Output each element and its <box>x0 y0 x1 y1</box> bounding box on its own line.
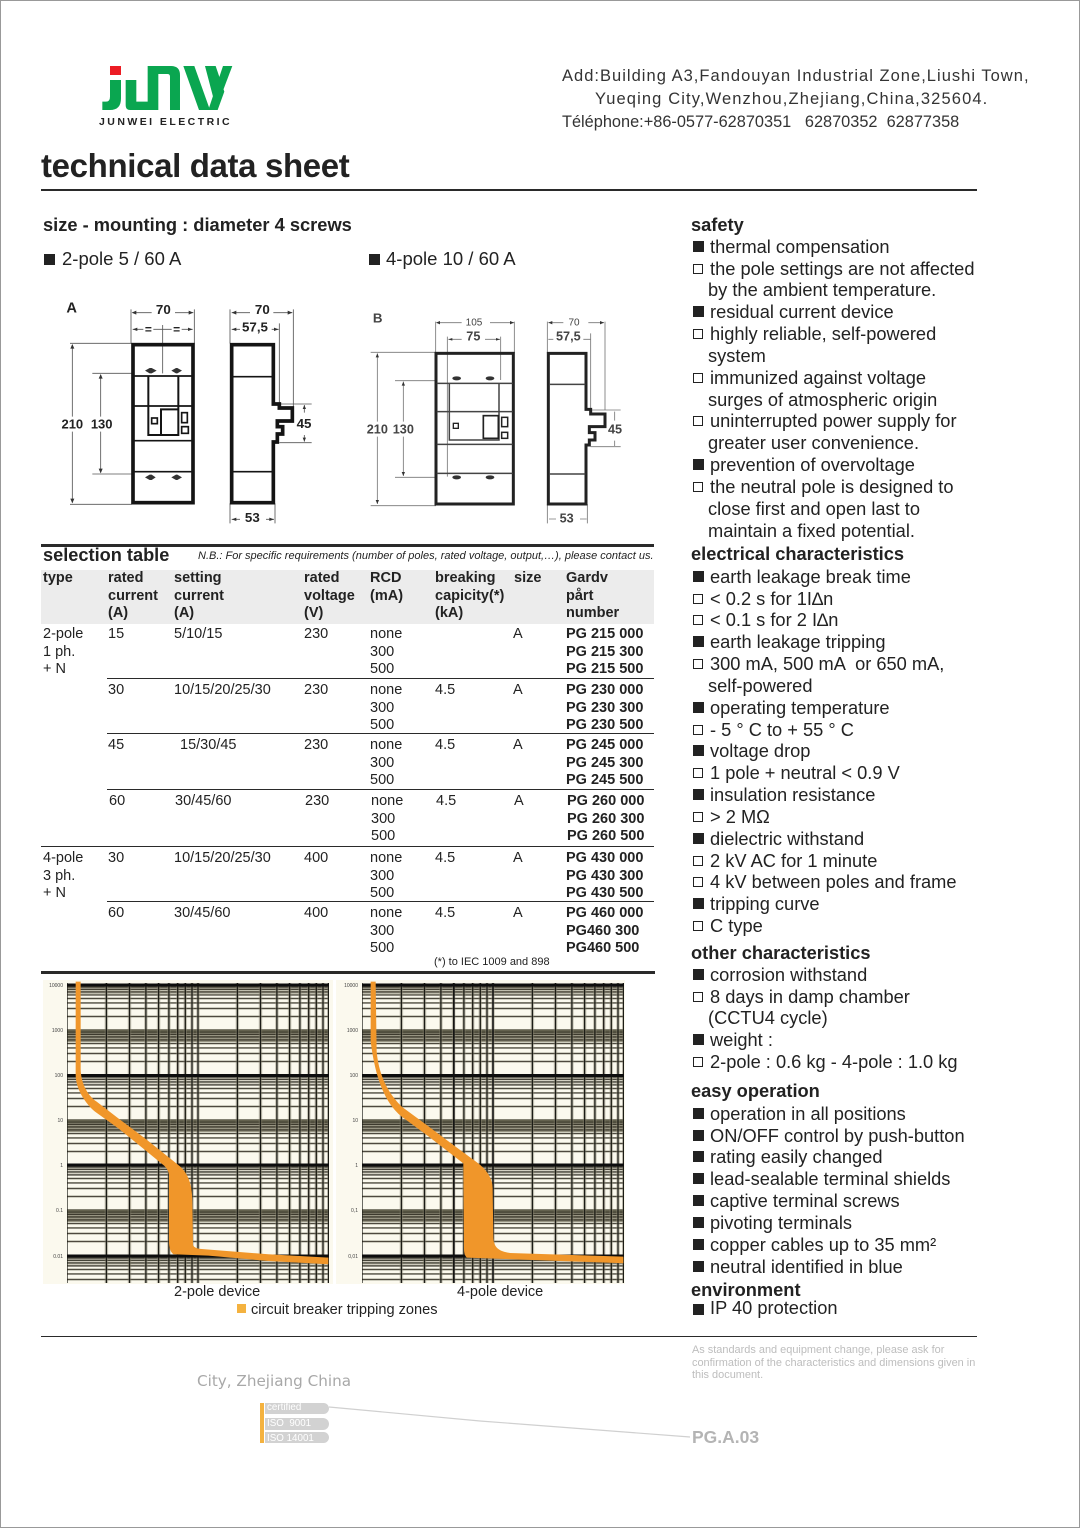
panel: safety: immunized against voltage <box>710 367 926 388</box>
row: 45 A: 15/30/45 <box>180 737 236 753</box>
dimension drawing A: 2-pole: 70 <box>255 302 270 317</box>
table header row: number <box>566 605 619 621</box>
chart: 2-pole device: 10 <box>57 1118 63 1124</box>
row: 15 A: 230 <box>304 626 328 642</box>
row: 60 A: 30/45/60 <box>175 793 231 809</box>
type label: 4-pole: + N <box>43 885 66 901</box>
row: 45 A: 4.5 <box>435 737 455 753</box>
panel: easy operation: ON/OFF control by push-button <box>710 1125 965 1146</box>
type label: 2-pole: 2-pole <box>43 626 83 642</box>
table header row: setting <box>174 570 222 586</box>
row: 30 A: none <box>370 682 402 698</box>
panel: electrical characteristics: 4 kV between poles and frame <box>710 871 957 892</box>
row: 30 A: 4.5 <box>435 682 455 698</box>
disclaimer note: confirmation of the characteristics and dimensions given in <box>692 1357 975 1369</box>
row: 4-pole 30 A: A <box>513 850 523 866</box>
chart: 4-pole device: 0,1 <box>351 1208 358 1214</box>
row: 4-pole 30 A <box>108 850 643 901</box>
panel: safety: residual current device <box>710 301 894 322</box>
panel: safety <box>691 214 974 541</box>
company address: Add:Building A3,Fandouyan Industrial Zone,Liushi Town, <box>562 67 1030 85</box>
type label: 2-pole: + N <box>43 661 66 677</box>
panel: other characteristics <box>691 942 958 1072</box>
dimension drawing A: 2-pole: = <box>145 322 152 336</box>
panel: electrical characteristics: > 2 MΩ <box>710 806 770 827</box>
row: 4-pole 60 A: 300 <box>370 923 394 939</box>
panel: safety: by the ambient temperature. <box>708 279 936 300</box>
type label: 2-pole: 1 ph. <box>43 644 75 660</box>
chart: 4-pole device: 100 <box>350 1073 358 1079</box>
panel: safety: system <box>708 345 766 366</box>
chart: 4-pole device: 1 <box>355 1163 358 1169</box>
caption: 4-pole device: 4-pole device <box>457 1284 543 1300</box>
table header row: (A) <box>174 605 194 621</box>
row: 60 A: PG 260 000 <box>567 793 644 809</box>
row: 60 A: 300 <box>371 811 395 827</box>
row: 4-pole 30 A: 300 <box>370 868 394 884</box>
certification badges: ISO 9001 <box>267 1418 311 1429</box>
panel: electrical characteristics: 1 pole + neutral < 0.9 V <box>710 762 900 783</box>
panel: easy operation: easy operation <box>691 1080 820 1101</box>
disclaimer note: As standards and equipment change, please ask for <box>692 1344 944 1356</box>
row: 15 A: A <box>513 626 523 642</box>
row: 45 A: PG 245 000 <box>566 737 643 753</box>
panel: electrical characteristics: electrical characteristics <box>691 543 904 564</box>
table header row: pårt <box>566 588 593 604</box>
label: 4-pole: 4-pole 10 / 60 A <box>386 248 516 269</box>
dimension drawing B: 4-pole: 75 <box>466 330 480 344</box>
table header row: breaking <box>435 570 495 586</box>
panel: environment: environment <box>691 1279 801 1300</box>
panel: easy operation: pivoting terminals <box>710 1212 852 1233</box>
certification badges: certified <box>267 1402 301 1413</box>
chart: 4-pole device: 1000 <box>347 1028 358 1034</box>
table header row: capicity(*) <box>435 588 504 604</box>
dimension drawing B: 4-pole: 130 <box>393 423 414 437</box>
row: 15 A: PG 215 000 <box>566 626 643 642</box>
row: 4-pole 30 A: 30 <box>108 850 124 866</box>
chart: 2-pole device <box>43 980 333 1288</box>
heading: size and mounting: size - mounting : diameter 4 screws <box>43 214 352 235</box>
panel: electrical characteristics: < 0.2 s for 1I∆n <box>710 588 833 609</box>
panel: other characteristics: 2-pole : 0.6 kg - 4-pole : 1.0 kg <box>710 1051 958 1072</box>
table header row: current <box>174 588 224 604</box>
dimension drawing A: 2-pole: 57,5 <box>242 319 269 334</box>
chart: 2-pole device: 0.1 <box>56 1208 63 1214</box>
panel: other characteristics: (CCTU4 cycle) <box>708 1007 828 1028</box>
panel: electrical characteristics <box>691 543 957 936</box>
chart: 2-pole device: 100 <box>55 1073 63 1079</box>
selection table <box>41 544 655 974</box>
row: 60 A: 60 <box>109 793 125 809</box>
panel: electrical characteristics: 2 kV AC for 1 minute <box>710 850 877 871</box>
table header row: rated <box>304 570 339 586</box>
table header row: type <box>43 570 73 586</box>
panel: safety: maintain a fixed potential. <box>708 520 915 541</box>
row: 45 A: A <box>513 737 523 753</box>
panel: safety: close first and open last to <box>708 498 920 519</box>
row: 45 A: none <box>370 737 402 753</box>
row: 30 A: 10/15/20/25/30 <box>174 682 271 698</box>
row: 4-pole 60 A: A <box>513 905 523 921</box>
chart: 2-pole device: 0.01 <box>53 1254 63 1260</box>
row: 30 A: PG 230 300 <box>566 700 643 716</box>
dimension drawing B: 4-pole: 70 <box>568 318 580 329</box>
row: 30 A: PG 230 500 <box>566 717 643 733</box>
row: 4-pole 30 A: 400 <box>304 850 328 866</box>
logo: JUNWEI ELECTRIC: JUNWEI ELECTRIC <box>99 116 232 128</box>
row: 15 A: 500 <box>370 661 394 677</box>
chart: 4-pole device: 10 <box>352 1118 358 1124</box>
row: 15 A: PG 215 500 <box>566 661 643 677</box>
row: 45 A: 500 <box>370 772 394 788</box>
chart: 4-pole device: 10000 <box>344 983 358 989</box>
dimension drawing B: 4-pole: 57,5 <box>556 330 581 344</box>
type label: 2-pole <box>43 626 83 677</box>
panel: easy operation: operation in all positions <box>710 1103 906 1124</box>
dimension drawing A: 2-pole: A <box>66 301 77 317</box>
row: 60 A: PG 260 500 <box>567 828 644 844</box>
page code: PG.A.03 <box>692 1427 759 1447</box>
table footnote: (*) to IEC 1009 and 898 <box>434 956 550 968</box>
panel: electrical characteristics: voltage drop <box>710 740 810 761</box>
table header row: (V) <box>304 605 323 621</box>
row: 4-pole 60 A: PG 460 000 <box>566 905 643 921</box>
dimension drawing B: 4-pole: 210 <box>367 423 388 437</box>
panel: easy operation: copper cables up to 35 mm² <box>710 1234 936 1255</box>
row: 60 A: 500 <box>371 828 395 844</box>
panel: safety: the neutral pole is designed to <box>710 476 954 497</box>
panel: electrical characteristics: - 5 ° C to + 55 ° C <box>710 719 854 740</box>
panel: safety: surges of atmospheric origin <box>708 389 937 410</box>
table note: N.B.: For specific requirements (number of poles, rated voltage, output,…), please contact us. <box>198 550 654 562</box>
table header row: Gardv <box>566 570 608 586</box>
panel: safety: greater user convenience. <box>708 432 919 453</box>
dimension drawing A: 2-pole: 45 <box>297 416 312 431</box>
row: 4-pole 30 A: PG 430 000 <box>566 850 643 866</box>
table header row: (kA) <box>435 605 463 621</box>
row: 15 A: none <box>370 626 402 642</box>
panel: environment: IP 40 protection <box>710 1297 838 1318</box>
panel: electrical characteristics: < 0.1 s for 2 I∆n <box>710 609 838 630</box>
row: 4-pole 30 A: PG 430 500 <box>566 885 643 901</box>
logo: JUNWEI ELECTRIC <box>99 66 232 128</box>
panel: environment <box>691 1279 838 1318</box>
panel: electrical characteristics: C type <box>710 915 763 936</box>
row: 4-pole 30 A: none <box>370 850 402 866</box>
dimension drawing B: 4-pole: 53 <box>560 512 574 526</box>
company address: Yueqing City,Wenzhou,Zhejiang,China,325604. <box>595 90 988 108</box>
row: 30 A: 500 <box>370 717 394 733</box>
row: 4-pole 60 A: PG460 500 <box>566 940 639 956</box>
panel: other characteristics: weight : <box>710 1029 773 1050</box>
dimension drawing A: 2-pole: 210 <box>61 417 83 432</box>
panel: safety: safety <box>691 214 744 235</box>
table header row <box>41 570 654 624</box>
dimension drawing A: 2-pole <box>61 301 312 525</box>
panel: easy operation: rating easily changed <box>710 1146 882 1167</box>
certification badges <box>260 1402 329 1443</box>
row: 15 A: PG 215 300 <box>566 644 643 660</box>
table header row: RCD <box>370 570 401 586</box>
row: 60 A: none <box>371 793 403 809</box>
dimension drawing B: 4-pole: 105 <box>466 318 483 329</box>
panel: easy operation: neutral identified in blue <box>710 1256 903 1277</box>
title: technical data sheet <box>41 147 349 184</box>
type label: 4-pole: 4-pole <box>43 850 83 866</box>
dimension drawing B: 4-pole <box>367 310 622 526</box>
row: 15 A: 300 <box>370 644 394 660</box>
table header row: rated <box>108 570 143 586</box>
row: 45 A: PG 245 500 <box>566 772 643 788</box>
disclaimer note: this document. <box>692 1369 763 1381</box>
panel: electrical characteristics: dielectric withstand <box>710 828 864 849</box>
row: 15 A: 15 <box>108 626 124 642</box>
panel: other characteristics: 8 days in damp chamber <box>710 986 910 1007</box>
chart: 4-pole device: 0,01 <box>348 1254 358 1260</box>
panel: electrical characteristics: 300 mA, 500 mA or 650 mA, <box>710 653 944 674</box>
table heading: selection table <box>43 545 169 565</box>
row: 4-pole 60 A <box>108 905 643 956</box>
row: 45 A: PG 245 300 <box>566 755 643 771</box>
legend: tripping zones: circuit breaker tripping zones <box>251 1302 438 1318</box>
row: 45 A: 45 <box>108 737 124 753</box>
type label: 4-pole: 3 ph. <box>43 868 75 884</box>
caption: 2-pole device: 2-pole device <box>174 1284 260 1300</box>
panel: easy operation <box>691 1080 965 1277</box>
dimension drawing A: 2-pole: = <box>173 322 180 336</box>
row: 30 A: 230 <box>304 682 328 698</box>
chart: 2-pole device: 1000 <box>52 1028 63 1034</box>
row: 60 A: 4.5 <box>436 793 456 809</box>
panel: safety: highly reliable, self-powered <box>710 323 936 344</box>
chart: 2-pole device: 10000 <box>49 983 63 989</box>
panel: safety: uninterrupted power supply for <box>710 410 957 431</box>
panel: electrical characteristics: earth leakage break time <box>710 566 911 587</box>
row: 60 A <box>109 793 644 844</box>
panel: easy operation: captive terminal screws <box>710 1190 900 1211</box>
row: 45 A: 300 <box>370 755 394 771</box>
row: 4-pole 60 A: PG460 300 <box>566 923 639 939</box>
table header row: voltage <box>304 588 355 604</box>
panel: electrical characteristics: earth leakage tripping <box>710 631 886 652</box>
type label: 4-pole <box>43 850 83 901</box>
dimension drawing B: 4-pole: B <box>373 310 383 325</box>
row: 60 A: 230 <box>305 793 329 809</box>
company address <box>562 67 1030 131</box>
tripping curve charts <box>43 980 625 1284</box>
row: 60 A: PG 260 300 <box>567 811 644 827</box>
row: 4-pole 30 A: 10/15/20/25/30 <box>174 850 271 866</box>
dimension drawing B: 4-pole: 45 <box>608 422 622 436</box>
connector line to page code <box>329 1406 690 1438</box>
dimension drawing A: 2-pole: 70 <box>156 302 171 317</box>
row: 45 A <box>108 737 643 788</box>
panel: electrical characteristics: operating temperature <box>710 697 890 718</box>
panel: safety: the pole settings are not affected <box>710 258 974 279</box>
chart: 2-pole device: 1 <box>60 1163 63 1169</box>
row: 45 A: 230 <box>304 737 328 753</box>
panel: safety: thermal compensation <box>710 236 890 257</box>
panel: electrical characteristics: self-powered <box>708 675 812 696</box>
dimension drawing A: 2-pole: 130 <box>91 417 113 432</box>
table header row: (A) <box>108 605 128 621</box>
row: 4-pole 60 A: 4.5 <box>435 905 455 921</box>
panel: electrical characteristics: tripping curve <box>710 893 820 914</box>
panel: other characteristics: other characteristics <box>691 942 871 963</box>
row: 4-pole 60 A: 30/45/60 <box>174 905 230 921</box>
row: 30 A <box>108 682 643 733</box>
chart: 4-pole device <box>336 980 625 1288</box>
row: 30 A: PG 230 000 <box>566 682 643 698</box>
row: 30 A: 300 <box>370 700 394 716</box>
table header row: (mA) <box>370 588 403 604</box>
row: 4-pole 60 A: 400 <box>304 905 328 921</box>
row: 15 A <box>108 626 643 677</box>
panel: easy operation: lead-sealable terminal shields <box>710 1168 950 1189</box>
dimension drawing A: 2-pole: 53 <box>245 510 260 525</box>
row: 30 A: A <box>513 682 523 698</box>
row: 4-pole 60 A: 500 <box>370 940 394 956</box>
label: 2-pole: 2-pole 5 / 60 A <box>62 248 181 269</box>
faded city text: City, Zhejiang China <box>197 1372 351 1390</box>
row: 4-pole 30 A: 4.5 <box>435 850 455 866</box>
row: 4-pole 30 A: PG 430 300 <box>566 868 643 884</box>
panel: electrical characteristics: insulation resistance <box>710 784 875 805</box>
row: 4-pole 30 A: 500 <box>370 885 394 901</box>
table header row: current <box>108 588 158 604</box>
row: 15 A: 5/10/15 <box>174 626 222 642</box>
table header row: size <box>514 570 541 586</box>
panel: safety: prevention of overvoltage <box>710 454 915 475</box>
disclaimer note <box>692 1344 975 1381</box>
row: 60 A: A <box>514 793 524 809</box>
panel: other characteristics: corrosion withstand <box>710 964 867 985</box>
company address: Téléphone:+86-0577-62870351 62870352 62877358 <box>562 113 959 131</box>
row: 4-pole 60 A: 60 <box>108 905 124 921</box>
row: 4-pole 60 A: none <box>370 905 402 921</box>
row: 30 A: 30 <box>108 682 124 698</box>
